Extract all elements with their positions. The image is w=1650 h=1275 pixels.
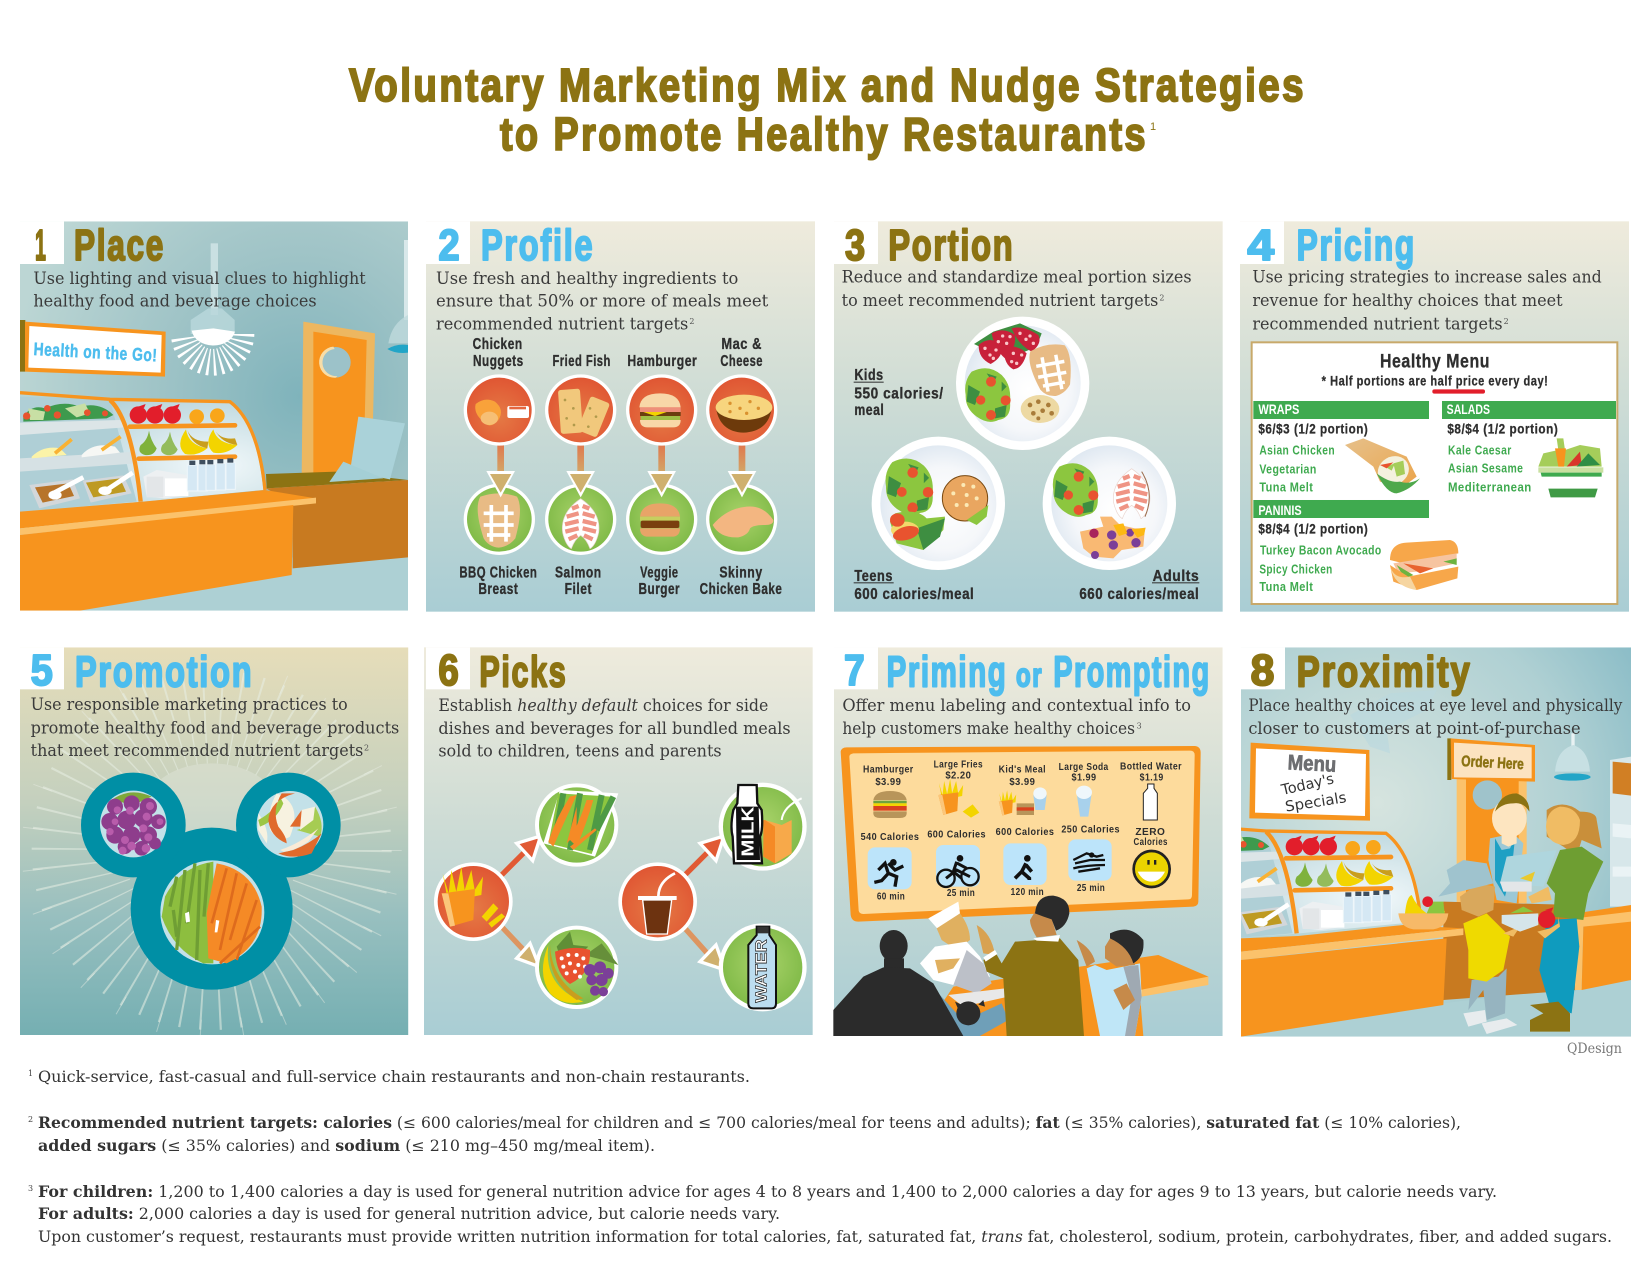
top labels: Fried Fish: [552, 353, 611, 370]
bottom labels: Skinny: [719, 565, 763, 582]
title: [349, 59, 1306, 160]
heading: 7: [844, 646, 867, 695]
bottom labels: Filet: [565, 581, 592, 598]
right shelving: [1610, 757, 1631, 907]
healthy food icons: [464, 484, 777, 555]
footnote 2: 2: [28, 1115, 33, 1124]
heading: 1: [35, 221, 47, 270]
title: 1: [1150, 121, 1156, 133]
text block: Use responsible marketing practices to: [31, 695, 348, 714]
board labels: Calories: [1133, 837, 1168, 848]
icon: fries: [434, 862, 513, 941]
text block: recommended nutrient targets: [436, 314, 688, 333]
person: child: [940, 995, 1008, 1036]
labels: Adults: [1153, 568, 1199, 585]
fruit bowl: [1398, 895, 1448, 929]
top labels: Cheese: [720, 353, 763, 370]
text block: [438, 696, 791, 761]
icon: water: WATER: [754, 939, 771, 1003]
text block: to meet recommended nutrient targets: [842, 291, 1158, 310]
panel 7: priming or prompting: [833, 646, 1223, 1036]
text block: [33, 269, 366, 311]
top labels: [473, 336, 763, 370]
text block: 2: [1159, 294, 1164, 303]
back counter: [1443, 902, 1631, 1000]
healthy menu: PANINIS: [1258, 502, 1302, 518]
person: customer woman: [1528, 805, 1603, 1032]
board labels: Hamburger: [863, 765, 914, 776]
person: server: [1488, 793, 1529, 903]
top labels: Chicken: [473, 336, 523, 353]
person: man in suit: [977, 896, 1084, 1036]
icon: wrap: [1345, 438, 1420, 493]
heading: Priming: [887, 648, 1007, 697]
footnote 2: Recommended nutrient targets: calories (≤ 600 calories/meal for children and ≤ 700 calories/meal for teens and adults); fat (≤ 35% calories), saturated fat (≤ 10% calories),: [38, 1114, 1461, 1132]
footnote 3: For children: 1,200 to 1,400 calories a day is used for general nutrition advice for ages 4 to 8 years and 1,400 to 2,000 calories a day for ages 9 to 13 years, but calorie needs vary.: [38, 1183, 1497, 1201]
title: Voluntary Marketing Mix and Nudge Strategies: [349, 59, 1306, 111]
board labels: $1.19: [1140, 773, 1164, 784]
labels: Teens: [854, 568, 893, 585]
bottom labels: Burger: [638, 581, 680, 598]
board labels: 60 min: [877, 891, 905, 902]
text block: Establish healthy default choices for side: [438, 696, 768, 715]
icon: carrots and celery: [535, 783, 618, 867]
person: child: [1438, 860, 1520, 1034]
heading: [438, 646, 567, 697]
board labels: Large Fries: [934, 759, 983, 770]
footnote 2: [28, 1114, 1461, 1155]
text block: Offer menu labeling and contextual info to: [842, 696, 1191, 715]
heading: Picks: [479, 648, 567, 697]
sign: menu: [1249, 743, 1370, 821]
healthy menu: Asian Chicken: [1259, 442, 1335, 457]
display case: [1241, 828, 1422, 938]
icon: sandwich: [1390, 540, 1458, 590]
text block: [1248, 696, 1623, 738]
panel 8: proximity: [1241, 647, 1631, 1037]
sign: order here: [1447, 738, 1535, 782]
healthy menu: Mediterranean: [1448, 480, 1532, 495]
text block: Use pricing strategies to increase sales and: [1252, 268, 1602, 287]
healthy menu: Turkey Bacon Avocado: [1260, 542, 1382, 557]
person: woman: [1077, 930, 1144, 1036]
footnote 3: For adults: 2,000 calories a day is used for general nutrition advice, but calorie needs vary.: [38, 1205, 780, 1223]
text block: [436, 269, 769, 333]
icon: milk and juice: [719, 783, 807, 871]
heading: Promotion: [75, 648, 253, 697]
sign: menu: Menu: [1287, 750, 1337, 777]
tray glass: [1500, 850, 1557, 892]
heading: [844, 654, 1208, 696]
heading: 5: [31, 646, 55, 695]
sunburst rays: [32, 670, 392, 1030]
text block: revenue for healthy choices that meet: [1252, 291, 1563, 310]
display case: [20, 393, 265, 512]
text block: Use lighting and visual clues to highlight: [33, 269, 366, 288]
healthy menu: Healthy Menu: [1380, 352, 1490, 373]
board labels: $2.20: [945, 770, 971, 781]
healthy menu: $8/$4 (1/2 portion): [1258, 520, 1368, 536]
heading: [31, 654, 250, 688]
icon: salad bowl: [1538, 438, 1603, 497]
heading: [438, 221, 594, 270]
board labels: $3.99: [875, 777, 901, 788]
icon: green beans and carrots: [162, 862, 262, 963]
sign: menu: Today's: [1279, 770, 1336, 799]
sign: menu: Specials: [1284, 789, 1348, 816]
back counter: [266, 417, 408, 568]
heading: 2: [438, 221, 462, 270]
panel 2: profile: [426, 221, 815, 612]
door: [302, 322, 375, 477]
text block: healthy food and beverage choices: [33, 292, 317, 311]
board labels: ZERO: [1135, 827, 1165, 838]
bottom labels: BBQ Chicken: [459, 565, 537, 582]
heading: Place: [74, 221, 165, 270]
heading: 6: [438, 646, 461, 695]
board labels: Large Soda: [1059, 762, 1109, 773]
heading: Pricing: [1297, 221, 1416, 270]
sign: order here: Order Here: [1461, 753, 1524, 773]
plate: teens: [872, 437, 1005, 570]
bottom labels: Salmon: [555, 565, 602, 582]
text block: help customers make healthy choices: [842, 719, 1135, 738]
text block: 2: [364, 744, 369, 753]
plate: adults: [1043, 437, 1176, 570]
activity icons: [868, 839, 1170, 889]
text block: sold to children, teens and parents: [438, 742, 722, 761]
bottom labels: Veggie: [640, 565, 678, 582]
icon: milk and juice: MILK: [737, 806, 757, 857]
lamp: [1554, 733, 1591, 781]
text block: Use fresh and healthy ingredients to: [436, 269, 738, 288]
bottom labels: Chicken Bake: [700, 581, 782, 598]
heading: 8: [1251, 646, 1277, 695]
panel 5: promotion: [20, 646, 408, 1035]
healthy menu: Tuna Melt: [1259, 579, 1313, 594]
text block: 3: [1137, 722, 1142, 731]
heading: 4: [1247, 221, 1277, 270]
credit: QDesign: [1567, 1041, 1622, 1057]
healthy menu: SALADS: [1447, 401, 1490, 417]
board labels: 120 min: [1011, 887, 1044, 898]
unhealthy food icons: [464, 374, 777, 446]
board labels: 250 Calories: [1061, 825, 1120, 836]
board labels: [861, 759, 1182, 902]
arrows: [497, 442, 745, 478]
heading: 3: [845, 221, 867, 270]
arrows: [502, 836, 725, 970]
healthy menu: $6/$3 (1/2 portion): [1258, 420, 1368, 436]
lamp glow: [184, 306, 241, 362]
arrow heads: [486, 471, 756, 497]
footnote 3: Upon customer’s request, restaurants must provide written nutrition information for total calories, fat, saturated fat, trans fat, cholesterol, sodium, protein, carbohydrates, fiber, and added sugars.: [38, 1228, 1612, 1246]
person: man in black: [833, 930, 963, 1036]
healthy menu: Tuna Melt: [1259, 480, 1313, 495]
person: chef: [920, 902, 1008, 1007]
heading: Proximity: [1297, 648, 1472, 697]
text block: closer to customers at point-of-purchase: [1248, 719, 1581, 738]
text block: [842, 696, 1191, 738]
labels: Kids: [854, 367, 884, 384]
panel 6: picks: [424, 646, 813, 1035]
sign: health on the go: [20, 320, 166, 377]
panel 1: place: [20, 221, 408, 611]
front counter: [1241, 925, 1463, 1037]
footnote 1: Quick-service, fast-casual and full-service chain restaurants and non-chain restaurants.: [38, 1068, 750, 1086]
menu board: [841, 746, 1201, 922]
icon: grapes: [101, 792, 166, 856]
board labels: $1.99: [1071, 773, 1096, 784]
footnote 2: added sugars (≤ 35% calories) and sodium (≤ 210 mg–450 mg/meal item).: [38, 1137, 655, 1155]
board labels: Bottled Water: [1120, 761, 1182, 772]
board labels: Kid's Meal: [999, 765, 1046, 776]
heading: or: [1016, 658, 1043, 695]
mouse-ear plate: [81, 773, 341, 990]
text block: 2: [1504, 317, 1509, 326]
front counter: [20, 490, 316, 611]
healthy menu: Spicy Chicken: [1259, 561, 1333, 576]
icon: fruit: [535, 926, 618, 1009]
healthy menu: Kale Caesar: [1448, 442, 1512, 457]
text block: Reduce and standardize meal portion sizes: [842, 268, 1192, 287]
text block: Place healthy choices at eye level and physically: [1248, 696, 1623, 715]
text block: [31, 695, 399, 760]
text block: dishes and beverages for all bundled meals: [438, 719, 791, 738]
title: to Promote Healthy Restaurants: [500, 108, 1148, 160]
top labels: Mac &: [721, 336, 762, 353]
heading: [1251, 646, 1472, 697]
labels: 660 calories/meal: [1079, 586, 1199, 603]
icon: water: [719, 923, 807, 1011]
icon: soda: [618, 862, 697, 941]
text block: recommended nutrient targets: [1252, 314, 1503, 333]
labels: 600 calories/meal: [854, 586, 974, 603]
board labels: 600 Calories: [927, 829, 986, 840]
board labels: $3.99: [1009, 777, 1035, 788]
sign: health on the go: Health on the Go!: [33, 339, 158, 365]
text block: ensure that 50% or more of meals meet: [436, 292, 769, 311]
plate: kids: [956, 317, 1089, 450]
panel 4: pricing: [1240, 221, 1629, 612]
heading: Prompting: [1053, 648, 1211, 697]
footnote 3: [28, 1183, 1612, 1246]
footnote 3: 3: [28, 1184, 33, 1193]
text block: [1252, 268, 1602, 333]
heading: [1247, 221, 1416, 270]
healthy menu: Vegetarian: [1259, 461, 1317, 476]
board labels: 25 min: [947, 888, 975, 899]
board labels: 540 Calories: [861, 832, 919, 843]
healthy menu: WRAPS: [1258, 401, 1299, 417]
heading: Portion: [888, 221, 1014, 270]
heading: [36, 228, 163, 262]
heading: Profile: [481, 221, 594, 270]
labels: [854, 367, 1199, 603]
top labels: Nuggets: [473, 353, 524, 370]
healthy menu: $8/$4 (1/2 portion): [1447, 420, 1558, 436]
text block: [842, 268, 1192, 310]
text block: that meet recommended nutrient targets: [31, 741, 363, 760]
text block: 2: [689, 317, 694, 326]
labels: meal: [854, 402, 884, 419]
text block: promote healthy food and beverage products: [31, 718, 399, 737]
top labels: Hamburger: [627, 353, 697, 370]
footnote 1: 1: [28, 1069, 33, 1078]
icon: apple slices: [258, 793, 322, 857]
panel 3: portion: [834, 221, 1223, 612]
labels: 550 calories/: [854, 385, 944, 402]
healthy menu: [1252, 342, 1617, 604]
healthy menu: * Half portions are half price every day!: [1322, 372, 1548, 388]
heading: [845, 221, 1014, 270]
bottom labels: Breast: [478, 581, 518, 598]
bottom labels: [459, 565, 782, 598]
healthy menu: Asian Sesame: [1448, 460, 1523, 475]
board labels: 25 min: [1077, 883, 1105, 894]
board labels: 600 Calories: [996, 827, 1054, 838]
board food icons: [873, 779, 1157, 820]
door: [1457, 777, 1527, 903]
back counter: [920, 955, 1208, 1036]
tray and apple: [1502, 907, 1560, 938]
